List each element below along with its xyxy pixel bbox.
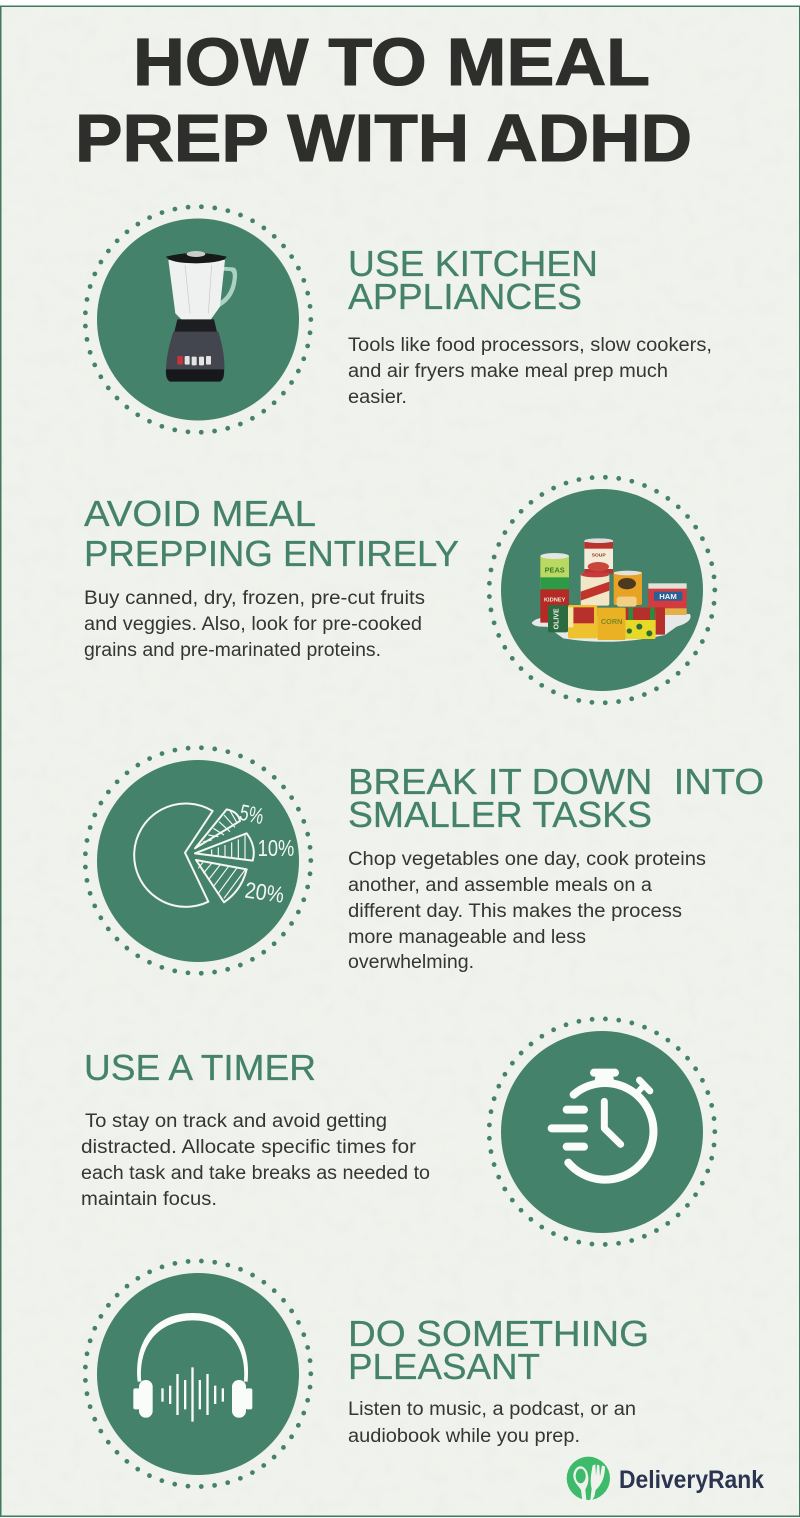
body text: overwhelming.	[348, 952, 474, 973]
body text	[348, 1399, 636, 1447]
heading: AVOID MEAL	[84, 493, 316, 534]
title: HOW TO MEAL	[133, 25, 650, 100]
body text: easier.	[348, 387, 407, 408]
body text: different day. This makes the process	[348, 901, 682, 922]
panel: do something pleasant	[85, 1261, 649, 1487]
body text: maintain focus.	[81, 1189, 217, 1210]
panel: avoid meal prepping entirely	[84, 477, 715, 703]
heading	[348, 243, 598, 317]
icon: headphones in dotted circle	[85, 1261, 311, 1487]
body text: audiobook while you prep.	[348, 1426, 580, 1447]
icon: pie chart in dotted circle: 20%	[243, 877, 286, 908]
body text: To stay on track and avoid getting	[85, 1111, 387, 1132]
heading: USE KITCHEN	[348, 243, 598, 284]
body text: and air fryers make meal prep much	[348, 361, 668, 382]
icon: canned food in dotted circle: HAM	[659, 592, 677, 601]
body text	[348, 849, 706, 973]
heading: BREAK IT DOWN INTO	[348, 761, 764, 802]
body text: Listen to music, a podcast, or an	[348, 1399, 636, 1420]
body text: distracted. Allocate specific times for	[81, 1137, 417, 1158]
body text	[84, 588, 425, 661]
panel: break it down into smaller tasks	[85, 748, 764, 973]
icon: canned food in dotted circle	[489, 477, 715, 703]
heading	[348, 1313, 649, 1387]
panel: use kitchen appliances	[85, 207, 712, 432]
body text: each task and take breaks as needed to	[81, 1163, 430, 1184]
body text: and veggies. Also, look for pre-cooked	[84, 614, 422, 635]
title	[75, 25, 692, 176]
logo: DeliveryRank	[567, 1457, 764, 1503]
body text: another, and assemble meals on a	[348, 875, 652, 896]
body text: more manageable and less	[348, 927, 586, 948]
heading	[348, 761, 764, 835]
body text	[81, 1111, 430, 1210]
icon: canned food in dotted circle: SOUP	[592, 553, 606, 559]
body text: Buy canned, dry, frozen, pre-cut fruits	[84, 588, 425, 609]
body text: Chop vegetables one day, cook proteins	[348, 849, 706, 870]
logo: DeliveryRank: DeliveryRank	[619, 1466, 764, 1494]
heading	[84, 493, 459, 574]
icon: stopwatch in dotted circle	[489, 1019, 715, 1244]
title: PREP WITH ADHD	[75, 101, 692, 176]
icon: canned food in dotted circle: OLIVE	[554, 608, 561, 629]
heading: SMALLER TASKS	[348, 794, 652, 835]
icon: pie chart in dotted circle	[85, 748, 311, 973]
body text: Tools like food processors, slow cookers,	[348, 335, 712, 356]
icon: pie chart in dotted circle: 5%	[237, 799, 266, 829]
body text: grains and pre-marinated proteins.	[84, 640, 381, 661]
heading: PREPPING ENTIRELY	[84, 533, 459, 574]
icon: canned food in dotted circle: PEAS	[545, 566, 565, 575]
icon: canned food in dotted circle: KIDNEY	[544, 597, 566, 603]
heading: DO SOMETHING	[348, 1313, 649, 1354]
heading: APPLIANCES	[348, 276, 582, 317]
icon: pie chart in dotted circle: 10%	[258, 835, 294, 861]
heading: PLEASANT	[348, 1346, 540, 1387]
heading: USE A TIMER	[84, 1047, 316, 1088]
body text	[348, 335, 712, 408]
panel: use a timer	[81, 1019, 715, 1244]
icon: blender in dotted circle	[85, 207, 311, 432]
icon: canned food in dotted circle: CORN	[601, 617, 622, 626]
